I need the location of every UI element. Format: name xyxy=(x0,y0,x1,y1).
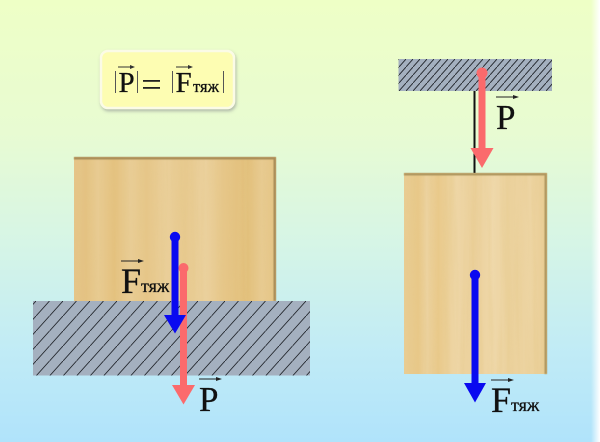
ground surface xyxy=(33,301,310,376)
formula: absolute F gravity xyxy=(172,65,224,99)
label: F gravity left: тяж xyxy=(141,276,170,296)
label: F gravity right xyxy=(491,378,540,420)
label: F gravity left: F xyxy=(121,261,141,301)
arrow: weight P right (pink) xyxy=(470,68,494,168)
label: P left: P xyxy=(199,380,218,419)
formula: absolute F gravity: тяж xyxy=(193,77,220,96)
formula: equals sign xyxy=(143,80,160,89)
label: P right: P xyxy=(496,98,515,137)
wooden block right xyxy=(404,173,547,374)
label: F gravity right: тяж xyxy=(511,395,540,415)
formula: absolute F gravity: F xyxy=(176,67,192,99)
arrow: gravity force left (blue) xyxy=(164,232,186,334)
formula box xyxy=(101,51,234,108)
ceiling support xyxy=(398,59,552,91)
wooden block left xyxy=(74,157,276,301)
arrow: gravity force right (blue) xyxy=(464,270,486,402)
label: F gravity left xyxy=(121,259,170,301)
suspension thread xyxy=(474,91,476,174)
formula: absolute P: P xyxy=(118,67,135,99)
label: F gravity right: F xyxy=(491,380,511,420)
arrow: weight P left (pink) xyxy=(172,263,195,404)
